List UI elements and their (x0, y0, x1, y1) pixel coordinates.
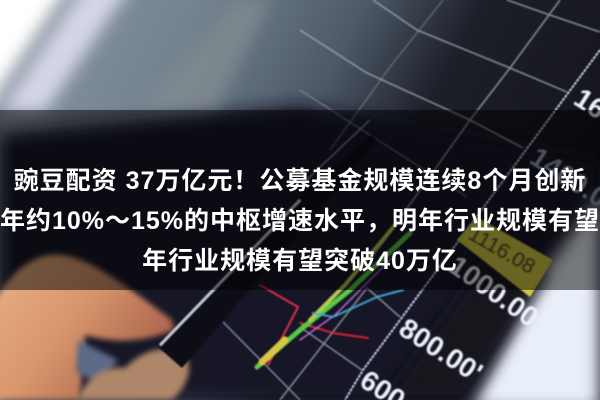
bright glare streaks (0, 0, 270, 118)
yellow price tag (457, 217, 553, 297)
gap behind the fingers (76, 340, 118, 385)
pale lower-right corner (470, 195, 600, 400)
dark blurred strip beside axis labels (385, 240, 545, 400)
title line 3: 年行业规模有望突破40万亿 (142, 247, 458, 275)
axis labels: 800.00' (394, 312, 488, 388)
chart lines (257, 225, 410, 367)
hand: thumb (78, 349, 189, 400)
price axis line (345, 50, 600, 400)
axis labels: 1000.00 (444, 250, 544, 333)
dark title band (0, 110, 600, 290)
hand: index finger (0, 255, 174, 400)
yellow price tag: 1116.08 (464, 222, 539, 279)
axis labels (355, 82, 600, 400)
title line 2: 年约10%～15%的中枢增速水平，明年行业规模有望 (0, 207, 600, 235)
chart grid lines (223, 0, 600, 400)
pen (158, 120, 376, 368)
dark lower screen (0, 105, 600, 400)
title line 1: 豌豆配资 37万亿元！公募基金规模连续8个月创新 (14, 167, 586, 195)
